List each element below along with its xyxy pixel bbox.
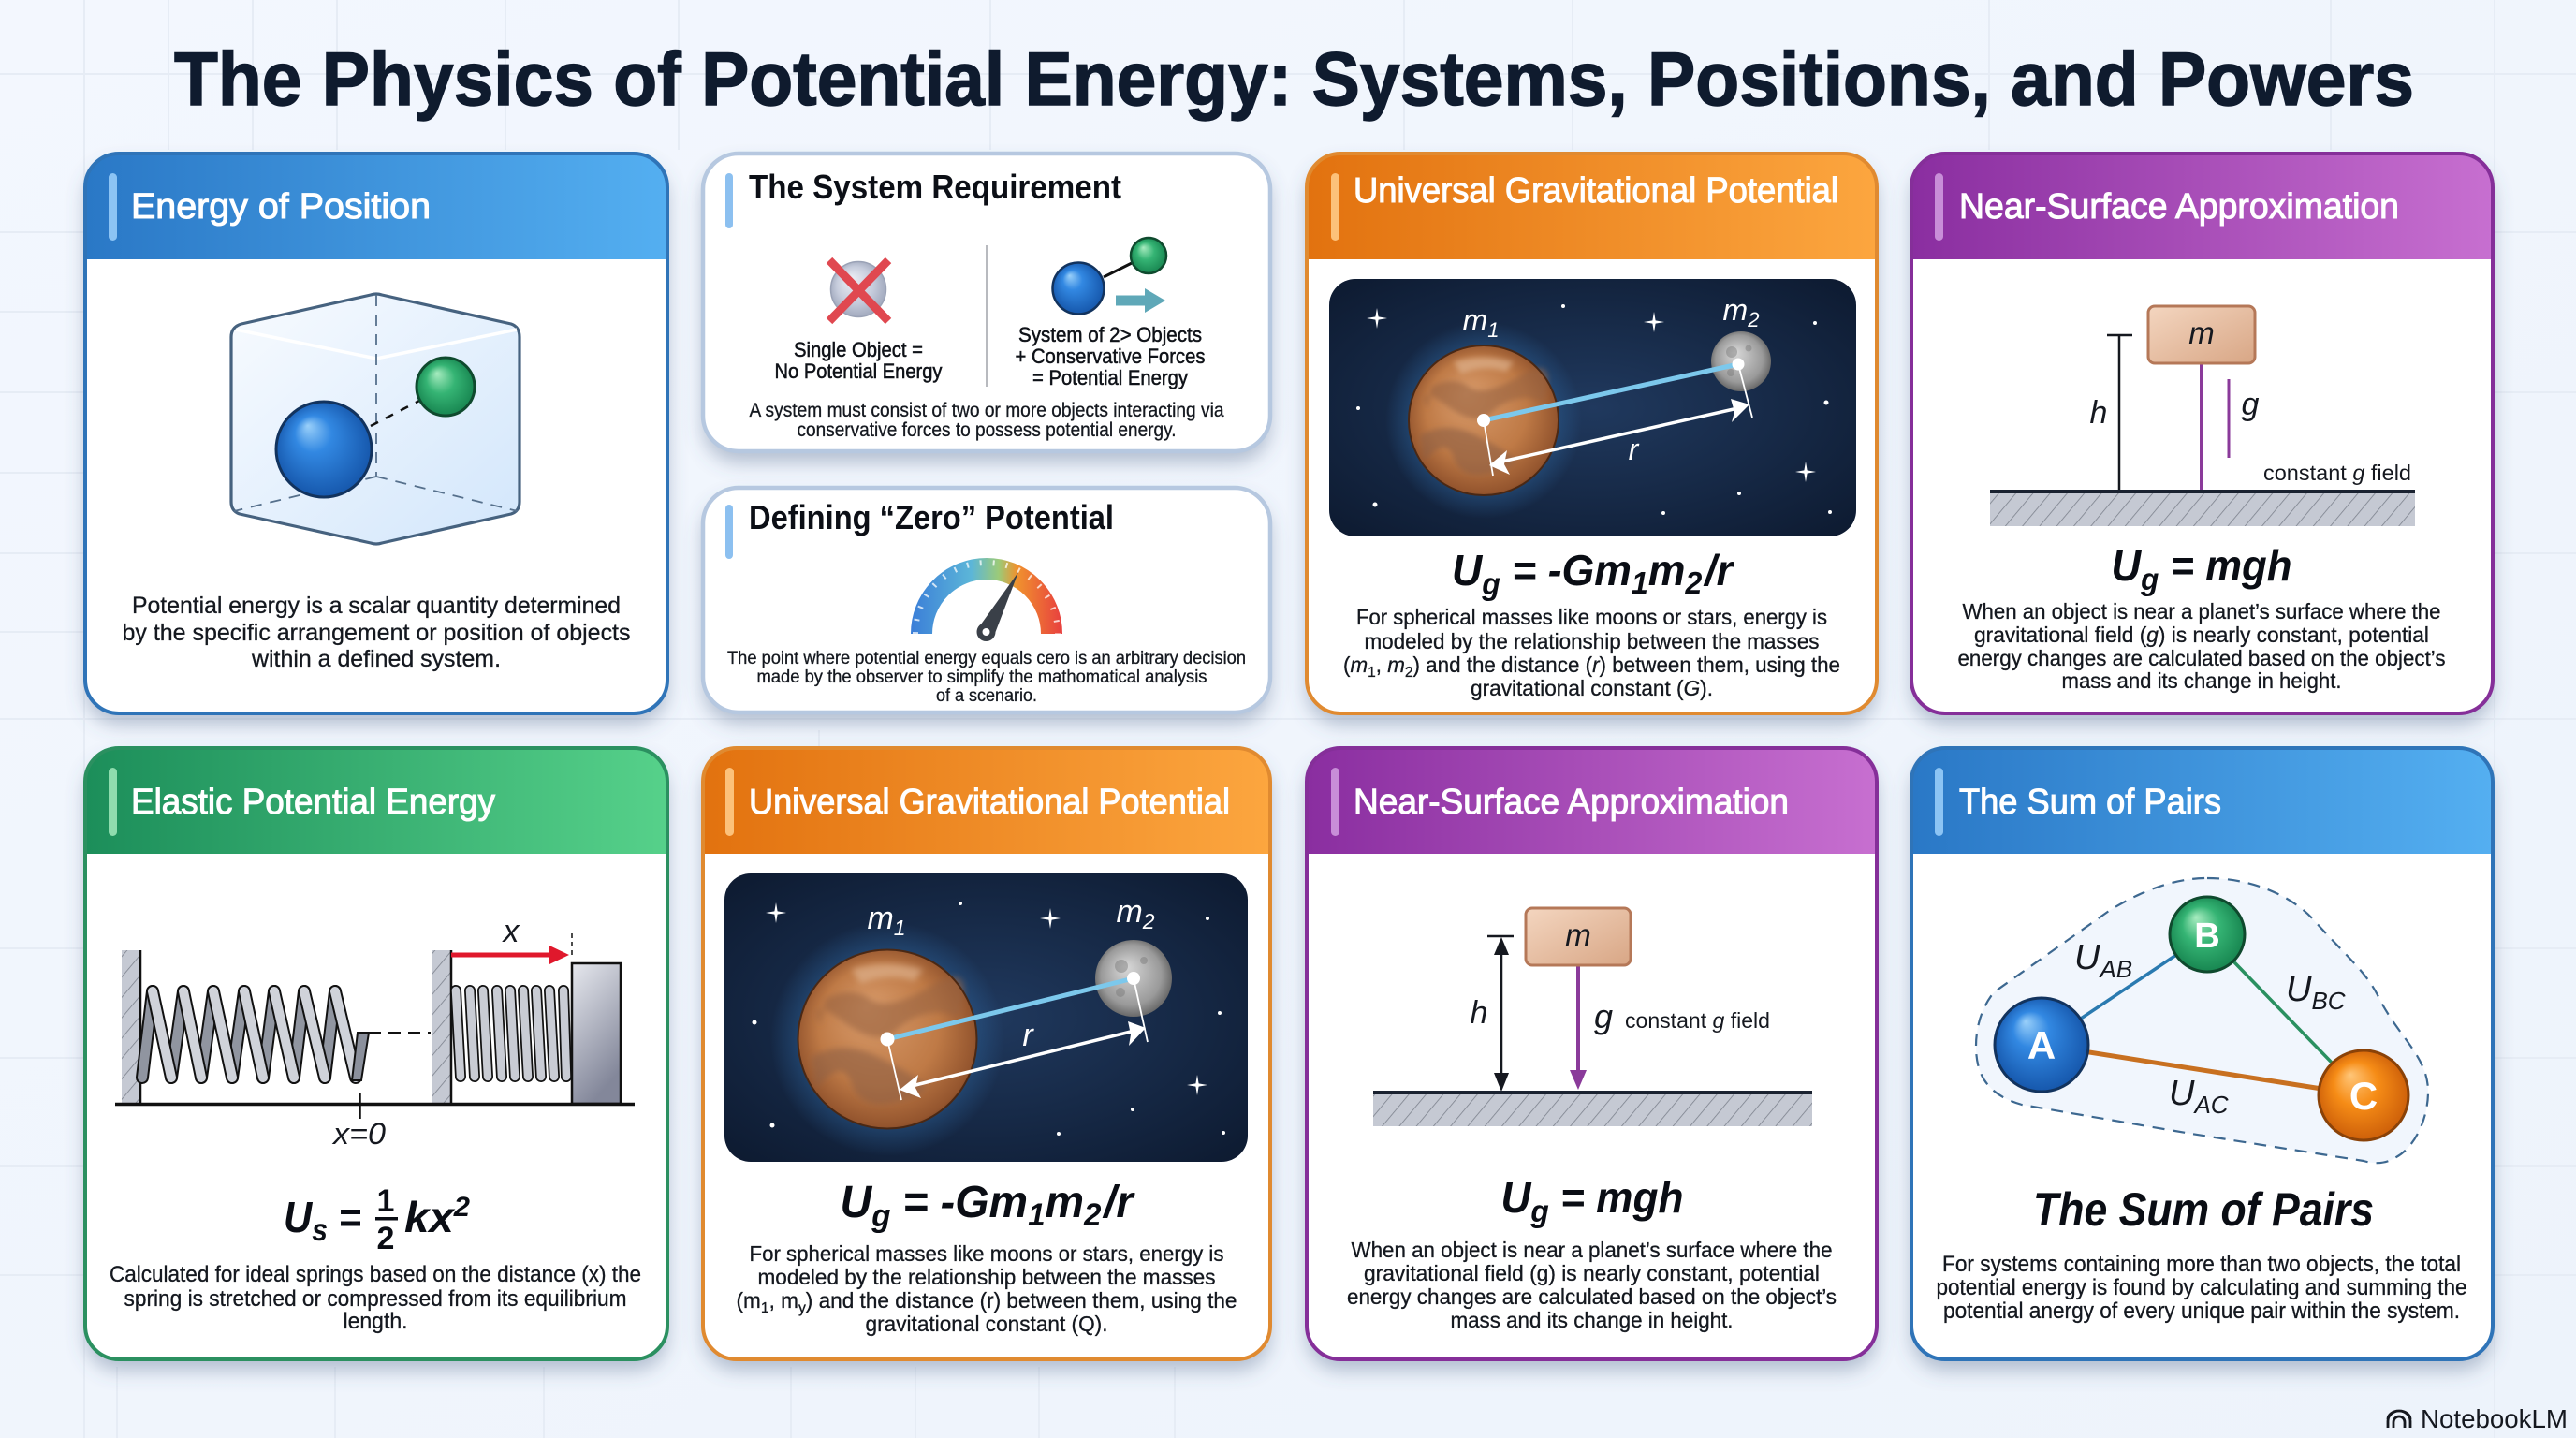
panel: energy of position xyxy=(85,154,667,713)
text block xyxy=(1936,1252,2467,1324)
text block xyxy=(122,593,631,672)
text block: When an object is near a planet’s surface where the xyxy=(1352,1238,1833,1262)
heading: Energy of Position xyxy=(131,187,431,227)
panel: near-surface approximation (top) xyxy=(1911,154,2493,713)
formula: m xyxy=(1648,546,1685,594)
illustration: planet and moon in space: 2 xyxy=(1747,308,1759,331)
text block: ) and the distance ( xyxy=(1413,653,1592,677)
illustration: planet and moon in space: m xyxy=(867,901,894,936)
text block: modeled by the relationship between the masses xyxy=(758,1265,1215,1289)
formula: U xyxy=(2112,541,2143,590)
text block: (m xyxy=(1343,653,1368,677)
icon: gauge xyxy=(915,563,1058,641)
text block: modeled by the relationship between the masses xyxy=(1365,629,1820,653)
diagram: springs: x xyxy=(502,914,520,949)
text block: , m xyxy=(769,1288,798,1313)
formula: 2 xyxy=(453,1192,470,1223)
panel: elastic potential energy xyxy=(85,748,667,1359)
label: system of objects xyxy=(1015,323,1206,389)
text block xyxy=(727,649,1246,706)
heading: Near-Surface Approximation xyxy=(1354,783,1789,822)
label: system of objects: = Potential Energy xyxy=(1032,366,1188,389)
illustration: planet and moon in space: 1 xyxy=(1487,318,1499,342)
logo: NotebookLM: NotebookLM xyxy=(2421,1404,2568,1433)
diagram: mass above ground: constant g field xyxy=(2263,461,2411,485)
text block: made by the observer to simplify the mathomatical analysis xyxy=(756,668,1208,687)
formula: 2 xyxy=(1083,1197,1102,1233)
text block xyxy=(1347,1238,1837,1332)
text block: energy changes are calculated based on the object’s xyxy=(1347,1284,1837,1309)
text block xyxy=(110,1262,641,1334)
icon: cube with two spheres xyxy=(231,294,520,544)
diagram: three sphere pairs: C xyxy=(2349,1074,2378,1118)
text block: For systems containing more than two objects, the total xyxy=(1942,1252,2461,1277)
illustration: planet and moon in space: m xyxy=(1723,293,1748,327)
text block: 1 xyxy=(761,1300,769,1316)
formula: 1 xyxy=(1632,565,1648,600)
text block: gravitational field (g) is nearly constant, potential xyxy=(1364,1261,1820,1285)
illustration: planet and moon in space: r xyxy=(1022,1018,1034,1053)
diagram: three sphere pairs: AC xyxy=(2192,1091,2229,1119)
text block: Calculated for ideal springs based on the distance (x) the xyxy=(110,1262,641,1287)
text block: conservative forces to possess potential energy. xyxy=(798,419,1176,441)
text block: For spherical masses like moons or stars, energy is xyxy=(749,1241,1224,1266)
text block: Potential energy is a scalar quantity determined xyxy=(132,593,621,619)
text block: , xyxy=(1376,653,1387,677)
text block: gravitational field (g) is nearly constant, potential xyxy=(1974,623,2429,647)
diagram: three sphere pairs: A xyxy=(2027,1023,2056,1067)
icon: two sphere system xyxy=(1052,238,1166,315)
formula: s xyxy=(312,1212,328,1247)
panel: defining zero potential xyxy=(703,488,1270,712)
text block: spring is stretched or compressed from its equilibrium xyxy=(124,1286,627,1312)
heading: Universal Gravitational Potential xyxy=(749,783,1230,822)
panel: near-surface approximation (bottom) xyxy=(1307,748,1877,1359)
illustration: planet and moon in space: m xyxy=(1116,894,1143,930)
text block: r) between them, using the xyxy=(1592,653,1847,677)
panel: universal gravitational potential (bottom) xyxy=(703,748,1270,1359)
illustration: planet and moon in space: 2 xyxy=(1142,909,1155,933)
text block: ) and the distance (r) between them, using the xyxy=(806,1288,1237,1313)
formula: /r xyxy=(1703,546,1734,594)
heading: The Sum of Pairs xyxy=(1959,783,2221,822)
panel: system requirement xyxy=(703,154,1270,451)
text block: When an object is near a planet’s surface where the xyxy=(1962,599,2441,624)
diagram: three sphere pairs: U xyxy=(2074,938,2100,977)
formula: U xyxy=(284,1193,315,1241)
formula: = -Gm xyxy=(890,1178,1028,1227)
formula: = xyxy=(328,1193,361,1241)
heading: Defining “Zero” Potential xyxy=(749,498,1114,536)
text block: potential energy is found by calculating and summing the xyxy=(1936,1275,2467,1300)
formula: g xyxy=(2140,562,2159,596)
formula xyxy=(284,1183,470,1256)
heading: Near-Surface Approximation xyxy=(1959,187,2399,227)
text block: length. xyxy=(343,1309,408,1334)
formula: U xyxy=(1452,546,1483,594)
text block: gravitational constant (Q). xyxy=(865,1312,1108,1336)
text block: energy changes are calculated based on the object’s xyxy=(1958,646,2445,670)
diagram: three sphere pairs xyxy=(1976,878,2428,1163)
title: The Physics of Potential Energy: Systems, Positions, and Powers xyxy=(174,37,2414,122)
text block xyxy=(749,400,1224,441)
diagram: springs xyxy=(115,914,635,1151)
formula: = mgh xyxy=(1549,1173,1683,1222)
text block: For spherical masses like moons or stars, energy is xyxy=(1356,605,1827,629)
text block: by the specific arrangement or position of objects xyxy=(122,620,631,646)
diagram: three sphere pairs: B xyxy=(2194,917,2220,956)
illustration: planet and moon in space: m xyxy=(1463,303,1487,337)
diagram: mass with height arrow: g xyxy=(1594,997,1613,1035)
illustration: planet and moon in space xyxy=(1329,279,1856,536)
diagram: mass with height arrow: constant g field xyxy=(1625,1008,1770,1033)
formula: 1 xyxy=(377,1183,394,1219)
diagram: mass above ground: g xyxy=(2242,387,2260,422)
text block: gravitational constant (G). xyxy=(1471,676,1713,700)
text block xyxy=(1958,599,2445,693)
text block: within a defined system. xyxy=(251,646,501,672)
diagram: three sphere pairs: BC xyxy=(2311,987,2346,1015)
diagram: three sphere pairs: U xyxy=(2169,1074,2194,1113)
diagram: mass with height arrow: m xyxy=(1565,917,1591,952)
diagram: mass above ground: m xyxy=(2188,315,2215,350)
label: system of objects: System of 2> Objects xyxy=(1018,323,1202,346)
illustration: planet and moon in space xyxy=(724,873,1248,1162)
label: system of objects: + Conservative Forces xyxy=(1015,345,1206,368)
formula: g xyxy=(1530,1194,1549,1228)
formula: 1 xyxy=(1028,1197,1045,1233)
formula: = mgh xyxy=(2159,541,2291,590)
text block xyxy=(736,1241,1237,1336)
formula: = -Gm xyxy=(1500,546,1632,594)
text block: mass and its change in height. xyxy=(1451,1308,1734,1332)
diagram: mass with height arrow: h xyxy=(1471,995,1487,1031)
formula: g xyxy=(871,1198,891,1234)
text block: potential anergy of every unique pair within the system. xyxy=(1943,1299,2460,1324)
formula: U xyxy=(1501,1173,1532,1222)
label: single object: No Potential Energy xyxy=(775,360,942,383)
heading: the sum of pairs: The Sum of Pairs xyxy=(2033,1183,2374,1236)
diagram: mass above ground: h xyxy=(2090,395,2107,431)
diagram: springs: x=0 xyxy=(331,1117,386,1151)
heading: The System Requirement xyxy=(749,168,1121,206)
text block: (m xyxy=(736,1288,761,1313)
text block: The point where potential energy equals cero is an arbitrary decision xyxy=(727,649,1246,668)
diagram: three sphere pairs: U xyxy=(2286,970,2311,1009)
formula: m xyxy=(1045,1178,1084,1227)
text block: mass and its change in height. xyxy=(2061,668,2342,693)
text block: y xyxy=(798,1300,806,1316)
text block xyxy=(1343,605,1840,700)
formula: kx xyxy=(404,1193,452,1241)
diagram: mass above ground xyxy=(1990,306,2415,526)
heading: Elastic Potential Energy xyxy=(131,783,495,822)
text block: of a scenario. xyxy=(936,686,1037,706)
text block: 2 xyxy=(1405,665,1413,681)
formula: /r xyxy=(1102,1178,1135,1227)
formula: 2 xyxy=(1685,565,1703,600)
label: single object xyxy=(775,338,942,383)
formula: g xyxy=(1481,566,1500,601)
diagram: mass with height arrow xyxy=(1373,908,1812,1126)
label: single object: Single Object = xyxy=(794,338,923,361)
text block: m xyxy=(1387,653,1405,677)
formula: 2 xyxy=(377,1221,394,1256)
text block: 1 xyxy=(1368,665,1376,681)
icon: crossed-out single sphere xyxy=(829,260,888,321)
illustration: planet and moon in space: r xyxy=(1629,433,1640,466)
formula: U xyxy=(841,1178,872,1227)
text block: A system must consist of two or more objects interacting via xyxy=(749,400,1224,421)
illustration: planet and moon in space: 1 xyxy=(894,916,906,940)
heading: Universal Gravitational Potential xyxy=(1354,171,1838,211)
diagram: three sphere pairs: AB xyxy=(2098,955,2132,983)
panel: sum of pairs xyxy=(1911,748,2493,1359)
panel: universal gravitational potential (top) xyxy=(1307,154,1877,713)
